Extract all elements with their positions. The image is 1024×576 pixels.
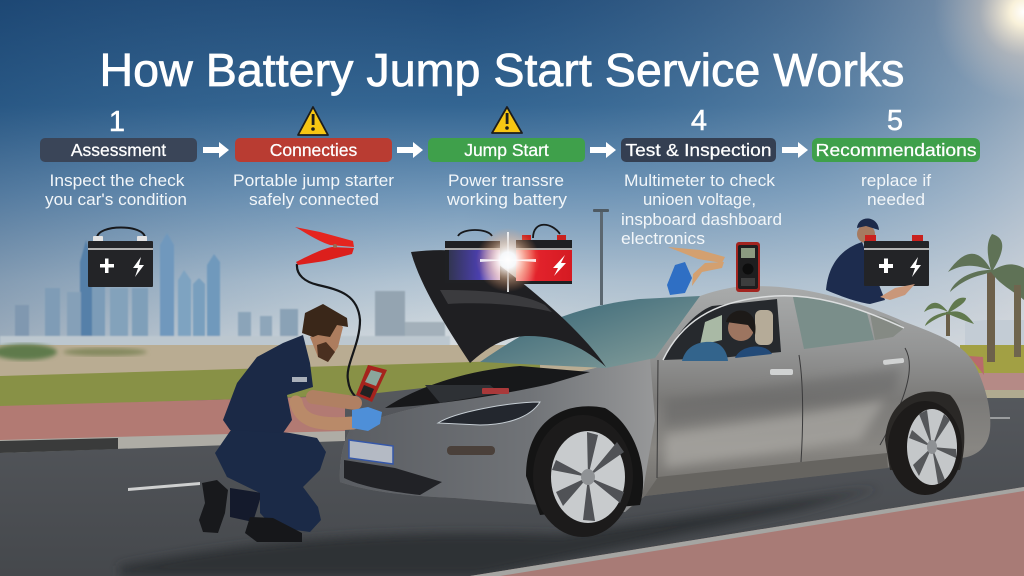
car: mirror xyxy=(682,342,728,361)
car: grille xyxy=(344,460,442,495)
background: sky xyxy=(0,0,1024,352)
step 4 xyxy=(621,105,782,248)
car xyxy=(340,250,990,537)
background: ground xyxy=(0,344,1024,576)
step 1 description xyxy=(45,172,187,209)
arrow 3 xyxy=(590,142,616,158)
step 4 description: electronics xyxy=(621,230,705,248)
step 2 xyxy=(233,107,395,209)
step 2 pill: Connecties xyxy=(270,140,358,160)
mechanic xyxy=(199,304,387,542)
step 5 number: 5 xyxy=(887,105,903,137)
step 4 pill: Test & Inspection xyxy=(626,140,772,160)
mechanic: head xyxy=(302,304,348,362)
mechanic: front boot xyxy=(245,517,302,542)
background: distant building right xyxy=(965,320,1024,345)
technician: head xyxy=(857,225,875,243)
icon: battery step 1 xyxy=(88,228,153,287)
icon: multimeter xyxy=(736,242,760,292)
title: How Battery Jump Start Service Works xyxy=(100,44,905,96)
technician with battery xyxy=(826,218,929,304)
car: side window driver xyxy=(663,299,781,360)
spark xyxy=(476,228,540,292)
step 1 number: 1 xyxy=(109,106,125,138)
car: engine bay xyxy=(385,366,590,408)
step 1 pill xyxy=(40,138,197,162)
step 1 description: Inspect the check xyxy=(50,172,185,190)
left battery xyxy=(445,230,500,283)
mechanic: front arm xyxy=(296,402,353,424)
step 5 pill: Recommendations xyxy=(816,140,977,160)
step 4 number: 4 xyxy=(691,105,707,137)
step 4 description: inspboard dashboard xyxy=(621,211,782,229)
car: sill xyxy=(645,453,888,496)
step 3 pill: Jump Start xyxy=(464,140,549,160)
right battery xyxy=(516,225,572,284)
step 3 xyxy=(428,107,585,209)
car: door seams xyxy=(657,348,909,478)
car: driver person xyxy=(726,311,772,358)
step 3 description: working battery xyxy=(446,191,568,209)
car: open hood xyxy=(411,250,606,367)
mechanic: sleeve logo xyxy=(292,377,307,382)
background: city skyline xyxy=(0,233,450,346)
car: body shell xyxy=(340,286,990,512)
step 3 pill xyxy=(428,138,585,162)
mechanic: upper arm back forearm xyxy=(313,397,355,403)
palm trees xyxy=(924,234,1024,362)
car: rear side window xyxy=(793,297,874,349)
step 5 description: replace if xyxy=(861,172,931,190)
step 4 description: Multimeter to check xyxy=(624,172,776,190)
icon: jump start batteries with spark xyxy=(445,225,572,292)
icon: red jumper clamp xyxy=(295,227,354,265)
mechanic: rear shin xyxy=(230,488,262,522)
arrow 4 xyxy=(782,142,808,158)
mechanic: multimeter xyxy=(356,365,387,402)
car: rear quarter window xyxy=(870,314,904,340)
step 1 pill: Assessment xyxy=(71,140,166,160)
step 2 description: safely connected xyxy=(249,191,379,209)
step 3 description xyxy=(446,172,568,209)
car: door handles xyxy=(770,369,793,375)
sidewalk foreground xyxy=(470,487,1024,576)
mechanic: glove xyxy=(352,407,382,431)
step 4 description: unioen voltage, xyxy=(643,191,756,209)
lamp post xyxy=(593,209,609,305)
step 5 description: needed xyxy=(867,191,925,209)
step 5 description xyxy=(861,172,931,209)
jump cable xyxy=(297,264,360,396)
mechanic: rear boot xyxy=(199,480,228,533)
car: tail light xyxy=(969,356,984,375)
step 2 warning icon xyxy=(298,107,328,135)
step 3 warning icon xyxy=(492,107,522,133)
mechanic: shirt xyxy=(223,335,313,433)
car: door highlight xyxy=(665,400,885,468)
arrow 2 xyxy=(397,142,423,158)
step 1 xyxy=(40,106,197,209)
car: front fascia xyxy=(340,358,655,512)
step 2 pill xyxy=(235,138,392,162)
car: windshield xyxy=(480,296,700,368)
step 5 xyxy=(812,105,980,209)
technician: hand xyxy=(880,284,915,300)
car: chrome window trim xyxy=(663,296,904,360)
technician: body xyxy=(826,242,885,304)
car: front wheel xyxy=(526,406,643,537)
car: number plate xyxy=(349,440,393,464)
car: fog light xyxy=(447,446,495,455)
step 2 description: Portable jump starter xyxy=(233,172,395,190)
mechanic: trousers xyxy=(215,427,326,532)
car: headlight xyxy=(438,402,540,425)
step 1 description: you car's condition xyxy=(45,191,187,209)
car: rear wheel xyxy=(885,391,964,495)
technician: cap xyxy=(857,218,879,230)
icon: tan clamp and blue glove xyxy=(667,247,725,295)
step 3 description: Power transsre xyxy=(448,172,564,190)
step 2 description xyxy=(233,172,395,209)
technician: battery xyxy=(864,235,929,286)
arrow 1 xyxy=(203,142,229,158)
step 4 description xyxy=(621,172,782,248)
